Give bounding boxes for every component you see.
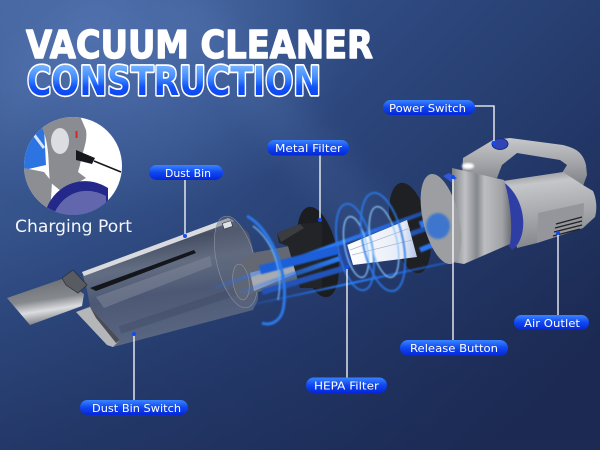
- callout: Dust Bin: [149, 165, 223, 180]
- release button: [443, 173, 457, 182]
- callout: Power Switch: [383, 100, 475, 115]
- light highlight: [462, 163, 474, 169]
- bin shell: [76, 218, 258, 347]
- bin latch: [62, 270, 87, 293]
- callout dots: [132, 141, 560, 336]
- collar: [452, 168, 511, 264]
- callout: Release Button: [400, 340, 508, 356]
- callout: Air Outlet: [514, 315, 589, 330]
- callout: Dust Bin: Dust Bin: [165, 167, 211, 180]
- title line: Construction: CONSTRUCTION: [27, 59, 321, 105]
- power button: [492, 138, 508, 150]
- nozzle: [7, 279, 84, 325]
- HEPA filter cone: [336, 220, 417, 269]
- airflow rings: [247, 189, 413, 324]
- vacuum: metal filter: [277, 203, 346, 301]
- inner tube: [237, 246, 300, 300]
- rear body: [503, 172, 596, 248]
- callout: Air Outlet: Air Outlet: [524, 317, 581, 330]
- callout: HEPA Filter: [306, 378, 387, 393]
- airflow: blue beams: [215, 207, 450, 305]
- blue ring: [503, 182, 523, 250]
- front disc: [413, 170, 469, 268]
- callout: Power Switch: Power Switch: [389, 102, 466, 115]
- callout: Metal Filter: [267, 140, 349, 156]
- callout leader lines: [134, 106, 558, 401]
- callout: Dust Bin Switch: Dust Bin Switch: [92, 402, 181, 415]
- title line: Vacuum Cleaner: VACUUM CLEANER: [26, 23, 373, 67]
- air vent: [553, 217, 582, 236]
- vacuum: rear filter disc: [382, 179, 438, 277]
- vacuum: motor body and handle: [413, 138, 596, 268]
- callout: Dust Bin Switch: [80, 400, 188, 415]
- callout: HEPA Filter: HEPA Filter: [314, 380, 380, 392]
- filter glow on disc: [426, 213, 450, 239]
- bin rim: [206, 212, 266, 312]
- bin bottom band: [76, 307, 120, 347]
- inset: charging port: [24, 117, 122, 215]
- vacuum: dust bin assembly: [7, 212, 300, 347]
- label: charging port: Charging Port: [15, 217, 132, 237]
- callout: Metal Filter: Metal Filter: [275, 142, 343, 155]
- callout: Release Button: Release Button: [410, 342, 498, 355]
- title: [26, 23, 373, 105]
- handle: [462, 138, 587, 186]
